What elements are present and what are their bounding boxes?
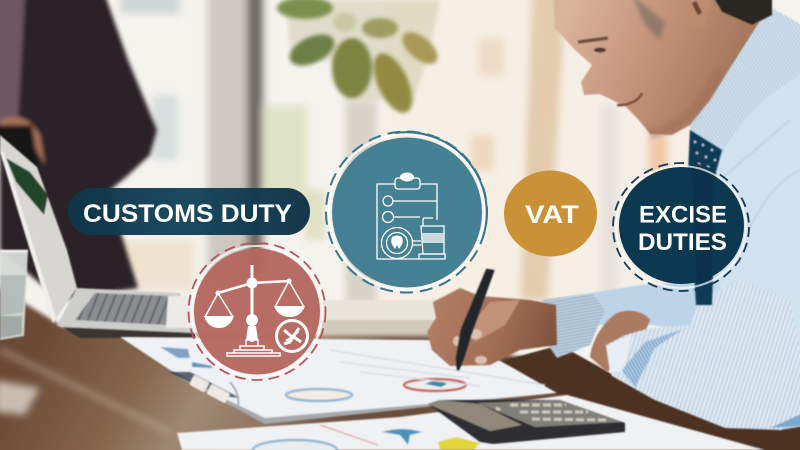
table shine streak [0, 350, 170, 432]
man's face [553, 0, 772, 135]
badge: VAT [504, 170, 597, 256]
necktie [688, 130, 722, 305]
rear sleeve and cuff [543, 282, 725, 358]
book behind hand [320, 300, 440, 337]
person in dark jacket [0, 0, 157, 300]
laptop [0, 135, 197, 338]
main document [120, 337, 557, 424]
badge: VAT: VAT [525, 201, 579, 229]
second fist [590, 311, 650, 372]
pill label: customs duty: CUSTOMS DUTY [83, 200, 292, 228]
binder clip on document [168, 372, 240, 406]
badge: customs clipboard icon [326, 132, 487, 292]
man's shirt [690, 5, 800, 430]
plant [277, 0, 443, 118]
pill label: customs duty [68, 188, 310, 235]
calculator [428, 400, 625, 444]
lower document [177, 395, 765, 450]
wooden table [0, 285, 800, 450]
dark wood behind arm [487, 345, 800, 450]
badge: excise duties: DUTIES [638, 229, 727, 256]
icon: clipboard with tooth and jar [377, 172, 445, 259]
icon: balance scale [204, 265, 308, 356]
drinking glass [0, 250, 28, 340]
badge: excise duties: EXCISE [639, 202, 727, 228]
pen [457, 270, 493, 370]
badge: excise duties [613, 163, 749, 291]
writing hand [427, 288, 557, 366]
front sleeve [606, 280, 800, 430]
badge: scales of justice icon [188, 243, 326, 380]
